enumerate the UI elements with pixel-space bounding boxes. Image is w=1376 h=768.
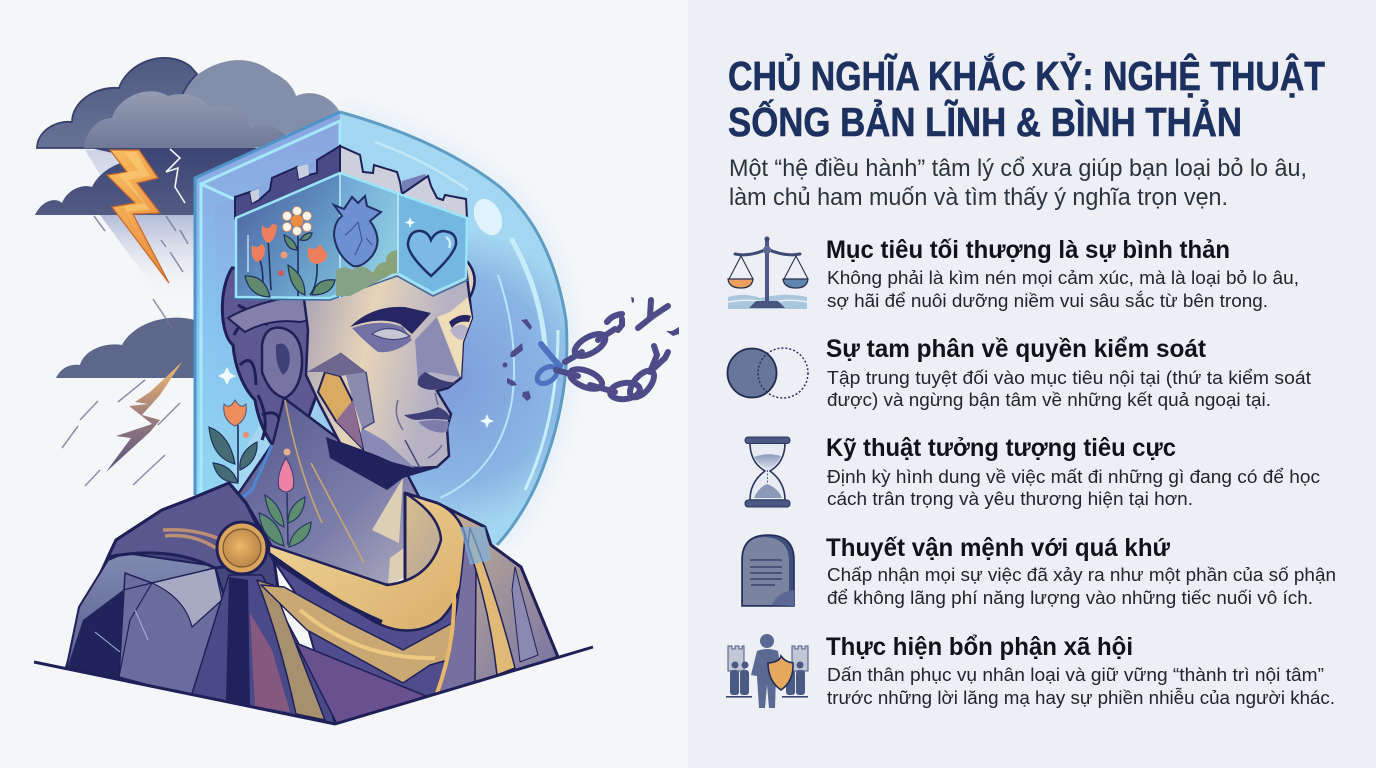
second gold swath [261, 585, 454, 683]
icon: guardian with shield and towers [726, 634, 808, 708]
item 1: ultimate goal [728, 236, 1299, 311]
description: để không lãng phí năng lượng vào những tiếc nuối vô ích. [827, 587, 1313, 608]
ear [262, 328, 302, 398]
chest highlight [372, 478, 428, 585]
description [827, 367, 1311, 410]
subtitle: làm chủ ham muốn và tìm thấy ý nghĩa trọn vẹn. [729, 184, 1228, 211]
title: SỐNG BẢN LĨNH & BÌNH THẢN [728, 99, 1242, 145]
description: Dấn thân phục vụ nhân loại và giữ vững “thành trì nội tâm” [827, 664, 1324, 685]
castle right wall [340, 146, 467, 218]
eye brow [350, 307, 431, 334]
garden flowers [245, 206, 335, 297]
illustration: stoic bust in a protective bubble [34, 58, 679, 740]
description: được) và ngừng bận tâm về những kết quả ngoại tại. [827, 389, 1271, 410]
heading: Thực hiện bổn phận xã hội [826, 633, 1133, 661]
bust body and cloak [60, 483, 558, 740]
neck left glow edge [235, 445, 272, 503]
heading: Sự tam phân về quyền kiểm soát [826, 335, 1207, 363]
neck crack line [285, 400, 364, 563]
right text panel background [688, 0, 1376, 768]
rain streaks [62, 216, 188, 486]
mouth [404, 407, 450, 420]
icon: stone tablet [742, 535, 794, 606]
item 5: social duty [726, 633, 1335, 708]
leaves [245, 233, 335, 297]
subtitle: Một “hệ điều hành” tâm lý cổ xưa giúp bạn loại bỏ lo âu, [729, 155, 1307, 182]
tulips [262, 224, 277, 243]
heading: Kỹ thuật tưởng tượng tiêu cực [826, 434, 1176, 462]
right side light shoulder [405, 493, 558, 700]
pedestal base line [34, 647, 593, 724]
broken chain [534, 300, 668, 401]
description: sợ hãi để nuôi dưỡng niềm vui sâu sắc từ bên trong. [827, 290, 1268, 311]
item 4: amor fati [742, 534, 1336, 608]
jaw shadow [326, 437, 437, 490]
top gold scarf [269, 493, 466, 631]
blue refraction [460, 527, 491, 565]
shoulder rock [66, 554, 224, 667]
castle back tower [402, 174, 437, 200]
description [827, 564, 1336, 608]
neck [234, 398, 430, 585]
eye [352, 323, 412, 352]
nose [418, 372, 458, 390]
gold facet [318, 372, 363, 449]
description [827, 267, 1299, 311]
glass panels [236, 173, 340, 298]
glass heart [408, 231, 456, 276]
face shading [415, 317, 460, 382]
neck tulip plant [259, 448, 311, 547]
lightning bolt small white [166, 149, 185, 203]
anatomical heart [334, 196, 381, 266]
icon: hourglass [745, 437, 790, 507]
lightning bolt lower [106, 362, 182, 472]
description [827, 664, 1335, 708]
far eye [449, 315, 471, 328]
cloak stripes below brooch [192, 574, 334, 722]
daisy [282, 206, 312, 236]
glass bubble [195, 112, 567, 545]
lightning bolt main [107, 150, 169, 283]
description: Không phải là kìm nén mọi cảm xúc, mà là loại bỏ lo âu, [827, 267, 1299, 288]
description: Chấp nhận mọi sự việc đã xảy ra như một phần của số phận [827, 564, 1336, 585]
icon: overlapping circles [728, 348, 808, 398]
description [827, 466, 1320, 509]
garden bushes [336, 266, 392, 296]
lower purple drape [270, 555, 470, 724]
face [262, 268, 472, 468]
icon: balance scale over water [728, 236, 808, 309]
subtitle [729, 155, 1307, 211]
description: Tập trung tuyệt đối vào mục tiêu nội tại (thứ ta kiểm soát [827, 367, 1311, 388]
description: trước những lời lăng mạ hay sự phiền nhiễu của người khác. [827, 687, 1335, 708]
heading: Mục tiêu tối thượng là sự bình thản [826, 236, 1230, 264]
storm clouds and lightning [35, 58, 340, 486]
dark facet [307, 353, 366, 376]
heading: Thuyết vận mệnh với quá khứ [826, 534, 1171, 562]
base silhouette [65, 482, 282, 667]
title [728, 53, 1325, 145]
chain fragments [502, 297, 679, 401]
description: cách trân trọng và yêu thương hiện tại hơn. [827, 488, 1193, 509]
item 3: negative visualization [745, 434, 1320, 509]
gold brooch [217, 522, 267, 574]
hair [222, 257, 475, 462]
castle left wall [235, 146, 340, 218]
upper cloak [108, 483, 262, 568]
item 2: dichotomy of control [728, 335, 1311, 410]
castle box with garden and hearts [233, 146, 468, 300]
description: Định kỳ hình dung về việc mất đi những gì đang có để học [827, 466, 1320, 487]
right vertical folds [437, 535, 476, 694]
left tulip plant [209, 400, 257, 483]
